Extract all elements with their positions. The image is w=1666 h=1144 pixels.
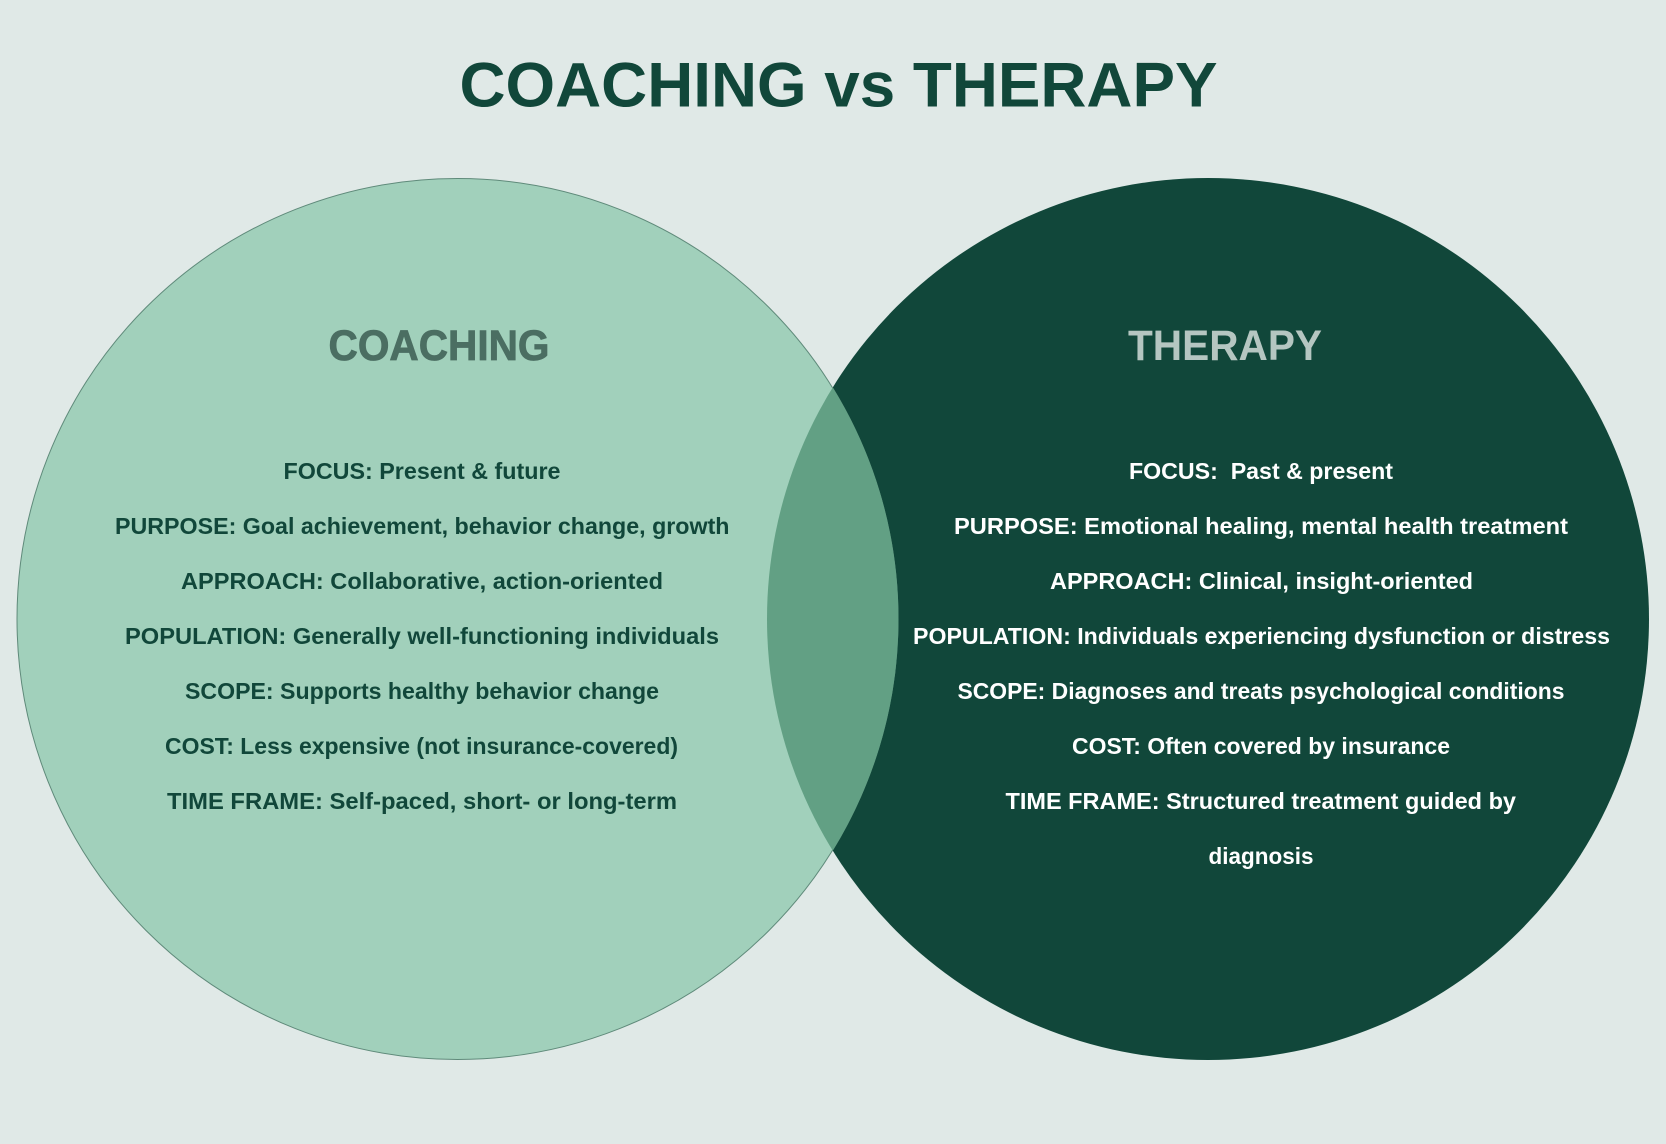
heading: therapy: THERAPY xyxy=(1128,323,1322,370)
circle: therapy xyxy=(767,178,1649,1060)
text block: coaching attributes: COST: Less expensive (not insurance-covered) xyxy=(165,733,678,759)
text block: therapy attributes: TIME FRAME: Structured treatment guided by xyxy=(1006,788,1516,814)
text block: coaching attributes: TIME FRAME: Self-paced, short- or long-term xyxy=(167,788,677,814)
panel: therapy xyxy=(913,323,1610,869)
text block: therapy attributes xyxy=(913,458,1610,869)
text block: therapy attributes: FOCUS: Past & present xyxy=(1129,458,1393,484)
text block: therapy attributes: PURPOSE: Emotional healing, mental health treatment xyxy=(954,513,1568,539)
text block: coaching attributes: PURPOSE: Goal achievement, behavior change, growth xyxy=(115,513,730,539)
text block: coaching attributes: APPROACH: Collaborative, action-oriented xyxy=(181,568,663,594)
text block: therapy attributes: POPULATION: Individuals experiencing dysfunction or distress xyxy=(913,623,1610,649)
circle overlap xyxy=(767,388,898,850)
panel: coaching xyxy=(115,323,730,814)
text block: coaching attributes: SCOPE: Supports healthy behavior change xyxy=(185,678,659,704)
circle: coaching xyxy=(17,178,898,1060)
heading: coaching: COACHING xyxy=(328,323,550,370)
text block: therapy attributes: APPROACH: Clinical, insight-oriented xyxy=(1050,568,1473,594)
title: COACHING vs THERAPY xyxy=(460,50,1218,120)
text block: therapy attributes: diagnosis xyxy=(1208,843,1314,869)
text block: therapy attributes: COST: Often covered by insurance xyxy=(1072,733,1450,759)
text block: therapy attributes: SCOPE: Diagnoses and treats psychological conditions xyxy=(958,678,1564,704)
text block: coaching attributes: FOCUS: Present & future xyxy=(284,458,560,484)
venn diagram xyxy=(16,178,1649,1060)
text block: coaching attributes xyxy=(115,458,730,814)
text block: coaching attributes: POPULATION: Generally well-functioning individuals xyxy=(125,623,719,649)
